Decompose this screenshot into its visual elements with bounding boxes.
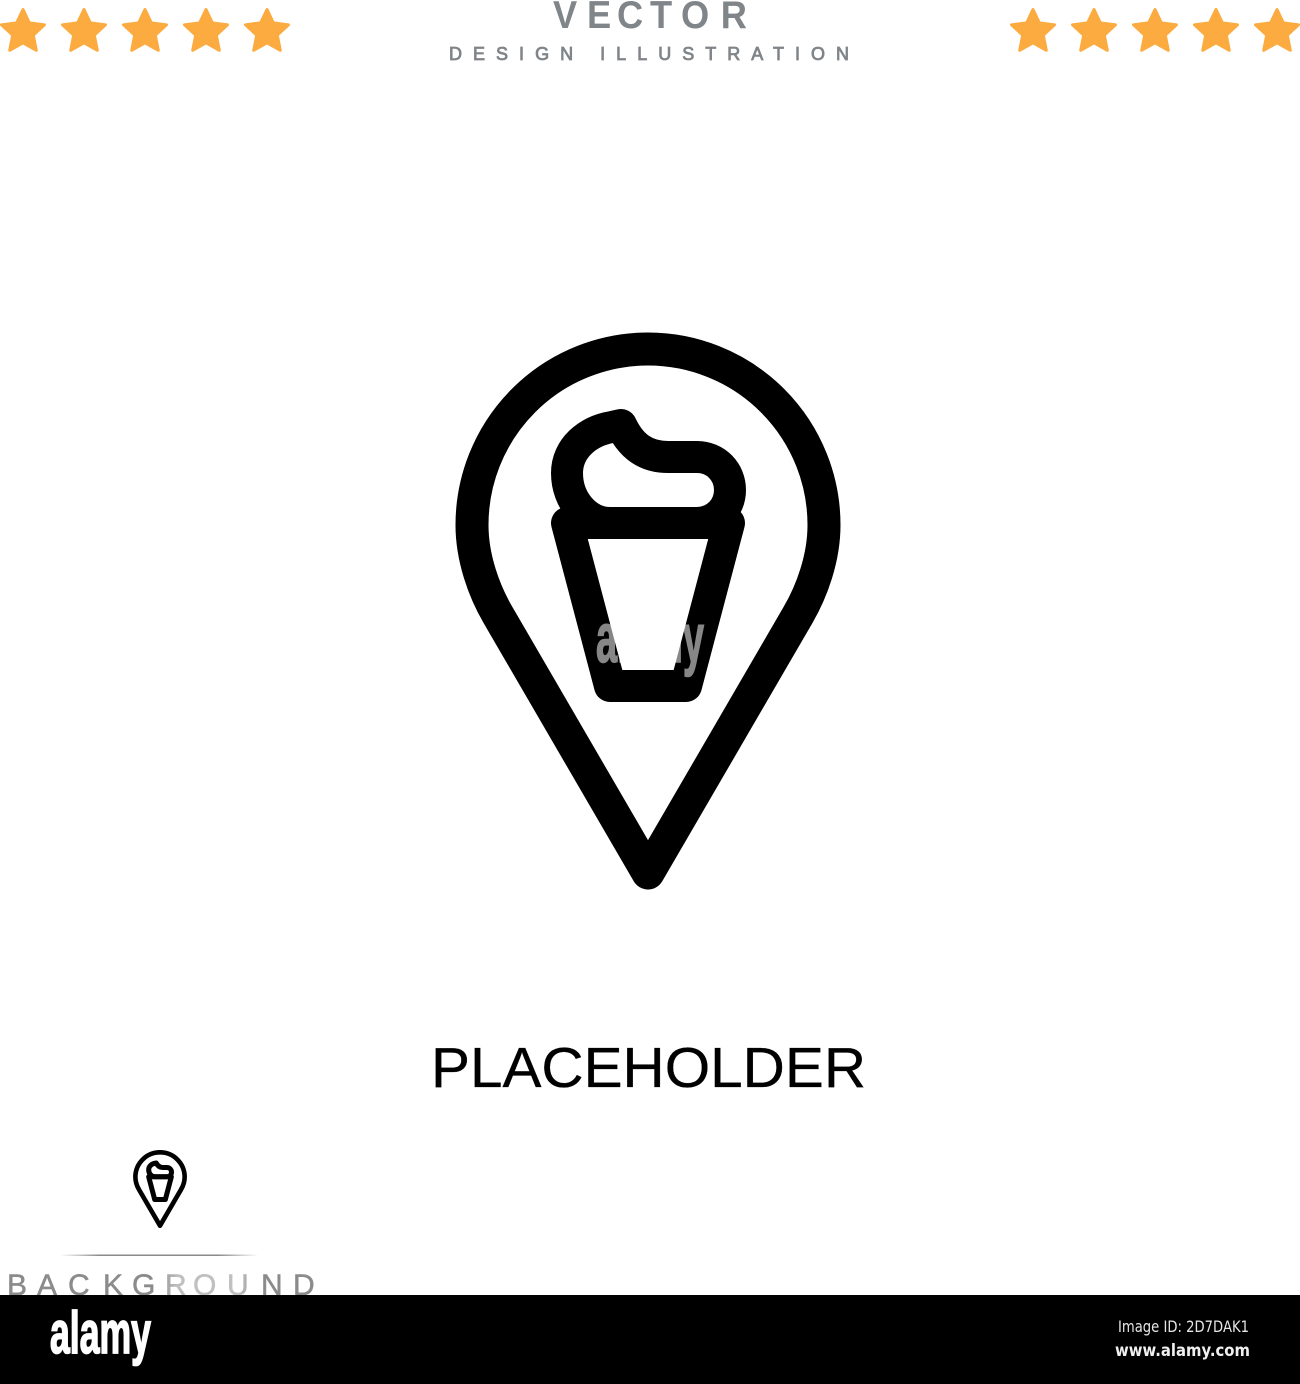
label: background: BACKGROUND: [7, 1269, 315, 1302]
left rating stars: [2, 10, 288, 50]
watermark over icon: alamy: [596, 599, 704, 677]
footer bar: [0, 1295, 1300, 1384]
label: placeholder: PLACEHOLDER: [431, 1036, 866, 1100]
subheading: design illustration: DESIGN ILLUSTRATION: [449, 44, 849, 64]
icon: map pin with ice cream cup: [472, 349, 824, 873]
small icon: map pin with ice cream cup: [135, 1152, 185, 1226]
image id: Image ID: 2D7DAK1: [1118, 1317, 1249, 1336]
cup body: [567, 523, 729, 686]
right rating stars: [1012, 10, 1298, 50]
cream swirl: [567, 425, 730, 523]
website: www.alamy.com: [1115, 1341, 1250, 1361]
footer logo: alamy: [50, 1300, 151, 1366]
pin outline: [472, 349, 824, 873]
